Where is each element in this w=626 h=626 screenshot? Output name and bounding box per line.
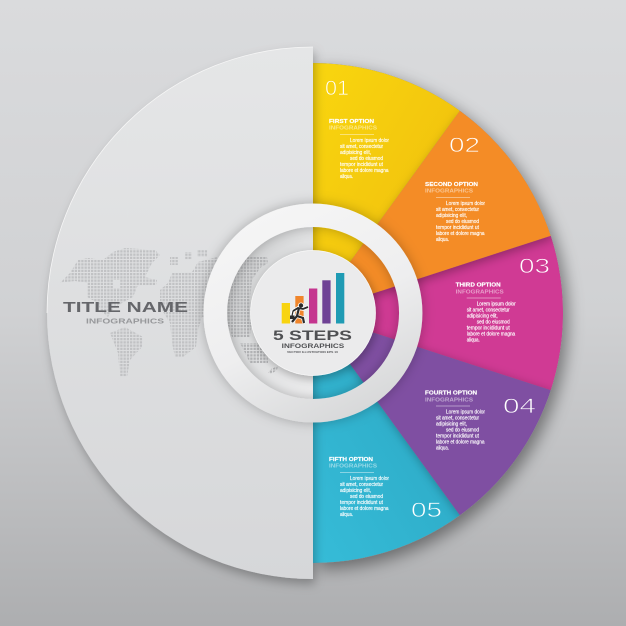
step 01 text: labore et dolore magna [340,168,389,174]
step 03 text: sed do eiusmod [477,320,510,326]
step 05 text: adipisicing elit, [340,488,371,494]
title text: INFOGRAPHICS [86,316,164,326]
step 05 text: INFOGRAPHICS [329,464,378,470]
step 02 text: INFOGRAPHICS [425,189,474,195]
step 01 text: adipisicing elit, [340,150,371,156]
white ring [203,204,422,422]
step 05 text: labore et dolore magna [340,506,389,512]
step 05 text [329,457,442,522]
step 02 text: sed do eiusmod [446,219,479,225]
center label [273,328,352,354]
step 03 text: tempor incididunt ut [467,326,510,332]
step 04 text: INFOGRAPHICS [425,397,474,403]
step 04 text: labore et dolore magna [436,440,485,446]
slice 02 orange [348,110,552,302]
step 03 text: 03 [519,255,550,278]
step 02 text: Lorem ipsum dolor [446,201,485,207]
disc highlight edge [47,47,313,313]
step 01 text: Lorem ipsum dolor [350,138,389,144]
step 05 text: FIFTH OPTION [329,457,373,463]
step 01 text [325,77,389,180]
step 03 text: labore et dolore magna [467,332,516,338]
step 03 text: Lorem ipsum dolor [477,302,516,308]
wheel shadow [313,63,563,563]
center label: INFOGRAPHICS [282,343,344,350]
step 03 text: aliqua. [467,338,480,344]
step 01 text: sed do eiusmod [350,156,383,162]
step 01 text: FIRST OPTION [329,119,375,125]
step 04 text: 04 [503,395,536,418]
title text: TITLE NAME [63,299,188,316]
title text [63,299,188,326]
panel: five colored slices [313,63,563,563]
slice 01 yellow [313,63,460,262]
inner well left half with map [226,227,313,399]
step 03 text: sit amet, consectetur [467,308,510,314]
step 01 text: tempor incididunt ut [340,162,383,168]
step 05 text: sed do eiusmod [350,494,383,500]
step 02 text: tempor incididunt ut [436,225,479,231]
step 04 text: sit amet, consectetur [436,416,479,422]
step 05 text: Lorem ipsum dolor [350,476,389,482]
step 04 text: aliqua. [436,446,449,452]
step 02 text: labore et dolore magna [436,231,485,237]
center disc [250,250,376,376]
step 01 text: sit amet, consectetur [340,144,383,150]
step 02 text: adipisicing elit, [436,213,467,219]
step 02 text [425,134,485,243]
step 01 text: INFOGRAPHICS [329,126,378,132]
step 04 text: Lorem ipsum dolor [446,410,485,416]
step 03 text [456,255,550,344]
center label: 5 STEPS [273,328,352,343]
step 04 text: tempor incididunt ut [436,434,479,440]
step 04 text: FOURTH OPTION [425,391,477,397]
center label: VECTOR ILLUSTRATION EPS 10 [287,350,338,354]
world map [60,248,225,377]
step 01 text: 01 [325,77,349,100]
slice 05 teal [313,364,460,563]
panel: title half disc [47,47,313,579]
step 02 text: 02 [449,134,480,157]
step 02 text: aliqua. [436,237,449,243]
slice 03 magenta [372,236,563,390]
step 03 text: adipisicing elit, [467,314,498,320]
step 04 text [425,391,536,452]
step 05 text: 05 [411,499,442,522]
step 04 text: adipisicing elit, [436,422,467,428]
bar chart [282,273,344,324]
step 03 text: THIRD OPTION [456,283,501,289]
slice 04 purple [346,330,551,518]
step 02 text: SECOND OPTION [425,182,478,188]
step 03 text: INFOGRAPHICS [456,289,505,295]
step 05 text: aliqua. [340,512,353,518]
step 05 text: tempor incididunt ut [340,500,383,506]
step 04 text: sed do eiusmod [446,428,479,434]
icon: running businessman [290,302,308,323]
step 02 text: sit amet, consectetur [436,207,479,213]
step 01 text: aliqua. [340,174,353,180]
step 05 text: sit amet, consectetur [340,482,383,488]
